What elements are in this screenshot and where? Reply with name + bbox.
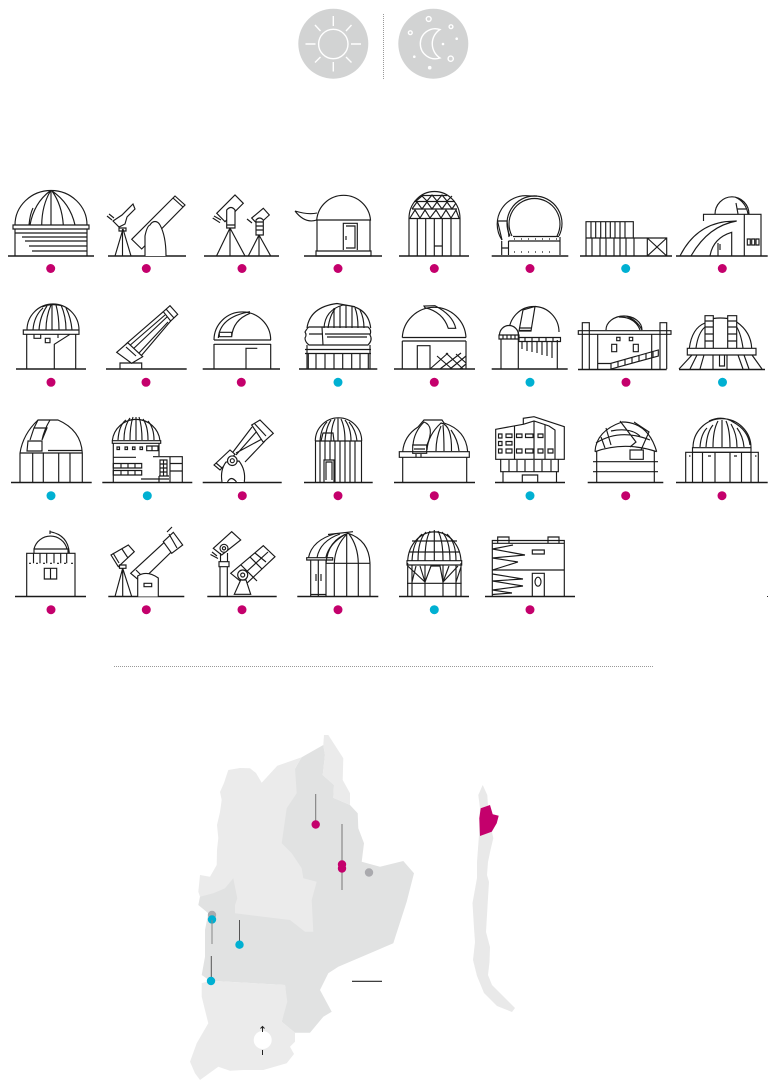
status dot (621, 264, 630, 273)
observatory 26 (108, 527, 184, 614)
observatory 12 (299, 304, 377, 387)
marker: grey and cyan coast (208, 911, 216, 944)
status dot (46, 378, 56, 387)
status dot (430, 378, 439, 387)
observatory 30 (485, 537, 575, 614)
observatory 21 (394, 420, 475, 500)
observatory 28 (297, 532, 378, 614)
icon: sun (298, 9, 368, 79)
status dot (718, 264, 727, 273)
status dot (718, 378, 727, 387)
observatory 11 (203, 312, 280, 387)
observatory 2 (107, 196, 186, 273)
status dot (237, 378, 246, 387)
observatory 19 (203, 420, 282, 500)
marker: magenta 1 (312, 794, 320, 829)
status dot (718, 491, 726, 500)
status dot (143, 491, 152, 500)
status dot (142, 264, 151, 273)
observatory 16 (679, 316, 765, 387)
compass (254, 1026, 272, 1055)
map: southern region (190, 981, 295, 1080)
observatory 29 (399, 530, 469, 614)
status dot (238, 264, 246, 273)
status dot (46, 264, 55, 273)
map: highlighted region (479, 805, 499, 836)
map: Chile locator (472, 785, 515, 1012)
marker: cyan inland (235, 920, 244, 949)
marker: grey (365, 868, 373, 877)
status dot (430, 264, 439, 273)
observatory 17 (11, 420, 92, 500)
status dot (526, 378, 534, 387)
status dot (142, 605, 151, 614)
scale bar (352, 980, 382, 982)
status dot (334, 264, 342, 273)
status dot (430, 605, 439, 614)
observatory 15 (578, 316, 671, 387)
marker: magenta pair (338, 824, 346, 890)
observatory 24 (676, 418, 768, 500)
status dot (238, 605, 246, 614)
status dot (334, 378, 342, 387)
map: regional detail (190, 735, 414, 1080)
observatory 5 (399, 191, 469, 273)
observatory 9 (16, 304, 86, 387)
observatory 3 (204, 195, 279, 273)
marker: cyan south (207, 956, 215, 985)
observatory 25 (15, 530, 86, 614)
observatory 13 (394, 306, 475, 387)
status dot (621, 491, 630, 500)
observatory 4 (295, 195, 382, 273)
status dot (334, 605, 342, 614)
observatory 18 (102, 417, 192, 500)
observatory 14 (492, 306, 568, 387)
observatory 6 (492, 196, 568, 273)
map: northern region (198, 757, 317, 932)
observatory 10 (106, 306, 187, 387)
status dot (526, 605, 534, 614)
status dot (334, 491, 342, 500)
observatory 1 (8, 191, 94, 273)
map: central region (198, 745, 414, 1033)
status dot (526, 491, 534, 500)
observatory 7 (580, 222, 672, 273)
status dot (430, 491, 439, 500)
observatory 27 (207, 532, 277, 614)
status dot (46, 491, 56, 500)
observatory 22 (495, 417, 565, 500)
map: north-east strip (323, 735, 350, 805)
icon: moon and stars (398, 9, 468, 79)
observatory 23 (588, 421, 663, 500)
observatory 8 (676, 197, 768, 273)
status dot (46, 605, 56, 614)
status dot (622, 378, 630, 387)
status dot (142, 378, 150, 387)
observatory 20 (304, 418, 373, 500)
status dot (526, 264, 534, 273)
status dot (238, 491, 247, 500)
